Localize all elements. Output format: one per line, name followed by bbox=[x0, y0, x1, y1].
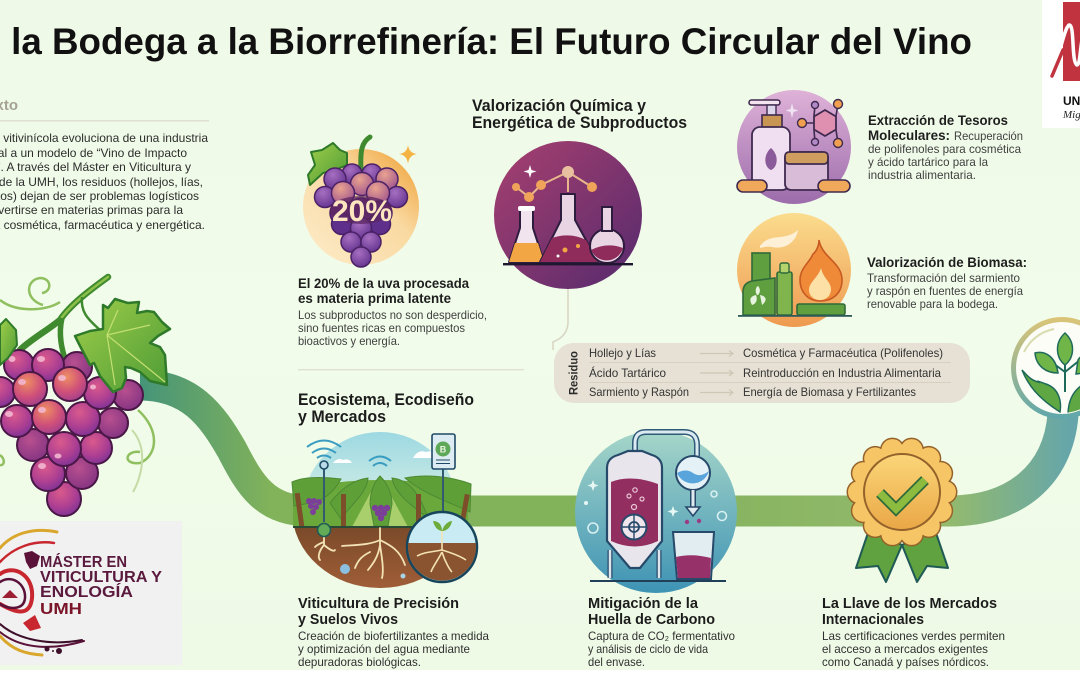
text block: extracción: industria alimentaria. bbox=[868, 168, 976, 182]
heading: llave bbox=[822, 595, 997, 628]
table: residuo: Ácido Tartárico bbox=[589, 365, 666, 380]
text block: biomasa: renovable para la bodega. bbox=[867, 297, 998, 311]
text block: 20 percent: bioactivos y energía. bbox=[298, 334, 400, 348]
vineyard rows bbox=[293, 480, 468, 527]
panel: viticultura de precisión bbox=[290, 430, 489, 669]
icon: vineyard, soil and sensors: B bbox=[440, 444, 447, 454]
icon: grape with 20% bbox=[303, 137, 419, 267]
text block: llave bbox=[822, 629, 1005, 669]
heading: viticultura bbox=[298, 595, 459, 628]
text block: llave: el acceso a mercados exigentes bbox=[822, 642, 988, 656]
text block: extracción: Extracción de Tesoros bbox=[868, 112, 1008, 128]
heading: valorización química bbox=[472, 97, 687, 132]
icon: chemistry flasks bbox=[494, 141, 642, 289]
text block: mitigación: del envase. bbox=[588, 655, 645, 669]
heading: 20 percent bbox=[298, 275, 469, 306]
arrows bbox=[700, 350, 733, 396]
heading: llave: La Llave de los Mercados bbox=[822, 595, 997, 612]
icon: grape with 20%: 20% bbox=[332, 195, 392, 228]
center flask bbox=[540, 194, 598, 262]
panel: mitigación de huella de carbono bbox=[575, 431, 737, 669]
heading: ecosistema bbox=[298, 391, 474, 426]
text block: 20 percent: Los subproductos no son desperdicio, bbox=[298, 308, 487, 322]
table: residuo: Sarmiento y Raspón bbox=[589, 385, 689, 399]
text block: viticultura bbox=[298, 629, 489, 669]
panel: valorización de biomasa bbox=[737, 213, 1027, 327]
heading: mitigación bbox=[588, 595, 715, 628]
heading: viticultura: y Suelos Vivos bbox=[298, 611, 398, 628]
icon: cosmetics and molecule bbox=[737, 90, 851, 204]
logo: Máster en Viticultura y Enología UMH: MÁSTER EN bbox=[40, 552, 127, 571]
text block: viticultura: Creación de biofertilizantes a medida bbox=[298, 629, 489, 643]
icon: right vine leaf bbox=[75, 299, 170, 392]
heading: ecosistema: Ecosistema, Ecodiseño bbox=[298, 391, 474, 409]
text block: biomasa bbox=[867, 254, 1027, 311]
text block: viticultura: depuradoras biológicas. bbox=[298, 655, 421, 669]
text block: biomasa: Transformación del sarmiento bbox=[867, 271, 1020, 285]
logo: Máster en Viticultura y Enología UMH bbox=[0, 521, 182, 665]
panel: contexto bbox=[0, 97, 209, 232]
icon: fermentation tank and CO2 capture bbox=[575, 431, 737, 593]
icon: biomass plant and flame bbox=[737, 213, 852, 327]
panel: extracción de tesoros moleculares bbox=[737, 90, 1023, 204]
text block: biomasa: y raspón en fuentes de energía bbox=[867, 284, 1023, 298]
text block: extracción bbox=[868, 112, 1023, 182]
heading: valorización química: Energética de Subproductos bbox=[472, 114, 687, 132]
heading: 20 percent: es materia prima latente bbox=[298, 290, 451, 306]
logo: Máster en Viticultura y Enología UMH: VITICULTURA Y bbox=[40, 569, 162, 586]
connector to table bbox=[553, 289, 568, 350]
text block: mitigación: y análisis de ciclo de vida bbox=[588, 642, 708, 656]
table: residuo: Cosmética y Farmacéutica (Polifenoles) bbox=[743, 346, 943, 360]
heading: 20 percent: El 20% de la uva procesada bbox=[298, 275, 469, 291]
text block: extracción: de polifenoles para cosmética bbox=[868, 142, 1021, 156]
logo: Máster en Viticultura y Enología UMH: ENOLOGÍA bbox=[40, 582, 133, 601]
ribbon: circular path bbox=[140, 385, 1063, 511]
heading: llave: Internacionales bbox=[822, 611, 924, 628]
text block: mitigación bbox=[588, 629, 735, 669]
text block: 20 percent bbox=[298, 308, 487, 348]
heading: ecosistema: y Mercados bbox=[298, 408, 386, 426]
heading: valorización química: Valorización Química y bbox=[472, 97, 647, 115]
sensor card bbox=[442, 469, 444, 515]
icon: certification medal bbox=[846, 438, 958, 582]
panel: 20 percent bbox=[298, 137, 487, 348]
text block: extracción: y ácido tartárico para la bbox=[868, 155, 988, 169]
logo: Máster en Viticultura y Enología UMH: UMH bbox=[40, 601, 82, 618]
text block: llave: como Canadá y países nórdicos. bbox=[822, 655, 989, 669]
text block: extracción: Recuperación bbox=[954, 129, 1023, 143]
bottom margin bbox=[0, 670, 1080, 675]
icon: left vine leaf bbox=[0, 319, 17, 365]
heading: mitigación: Mitigación de la bbox=[588, 595, 699, 612]
text block: llave: Las certificaciones verdes permiten bbox=[822, 629, 1005, 643]
icon: sustainable plant in ring bbox=[1011, 317, 1080, 419]
text block: contexto bbox=[0, 131, 208, 232]
icon: vineyard, soil and sensors bbox=[290, 430, 477, 592]
text block: biomasa: Valorización de Biomasa: bbox=[867, 254, 1027, 270]
left flask bbox=[509, 210, 544, 262]
text block: 20 percent: sino fuentes ricas en compuestos bbox=[298, 321, 465, 335]
round flask bbox=[590, 229, 624, 263]
row label: Residuo bbox=[566, 351, 580, 395]
panel: llave de los mercados bbox=[822, 438, 1005, 669]
heading: mitigación: Huella de Carbono bbox=[588, 611, 715, 628]
table: residuo bbox=[554, 343, 970, 403]
soil lens bbox=[407, 512, 477, 582]
text block: extracción: Moleculares: bbox=[868, 127, 950, 143]
table: residuo: Reintroducción en Industria Alimentaria bbox=[743, 366, 941, 380]
logo: Universidad Miguel Hernández bbox=[1042, 0, 1080, 128]
sensor left bbox=[323, 466, 325, 522]
icon: grape bunch bbox=[0, 277, 170, 516]
table: residuo: Energía de Biomasa y Fertilizantes bbox=[743, 385, 916, 399]
text block: mitigación: Captura de CO₂ fermentativo bbox=[588, 629, 735, 643]
text block: viticultura: y optimización del agua mediante bbox=[298, 642, 470, 656]
heading: viticultura: Viticultura de Precisión bbox=[298, 595, 459, 612]
table: residuo: Hollejo y Lías bbox=[589, 346, 656, 360]
